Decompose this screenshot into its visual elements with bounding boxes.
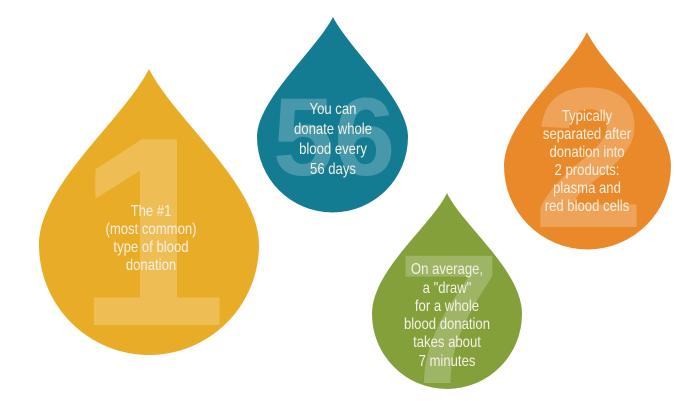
text: most common: type of blood [113,239,189,256]
text: separated into 2 products [543,108,631,215]
big digit 2: 2 [533,47,645,270]
text: most common: The #1 [131,203,171,220]
text: donate every 56 days [294,101,372,178]
text: donate every 56 days: blood every [299,141,368,158]
text: draw takes 7 minutes [404,261,490,370]
text: separated into 2 products: donation into [549,144,625,161]
text: most common: donation [126,257,176,274]
drop: green 7 [372,193,522,401]
text: most common: (most common) [105,221,197,238]
text: separated into 2 products: red blood cells [545,198,629,215]
text: separated into 2 products: Typically [562,108,613,125]
drop: yellow #1 [39,69,259,383]
text: donate every 56 days: 56 days [310,161,356,178]
text: separated into 2 products: plasma and [553,180,621,197]
drop: teal 56 [257,17,408,212]
text: draw takes 7 minutes: takes about [413,334,481,351]
text: draw takes 7 minutes: a "draw" [423,280,471,297]
text: separated into 2 products: separated after [543,126,631,143]
text: draw takes 7 minutes: On average, [411,261,483,278]
text: draw takes 7 minutes: 7 minutes [419,353,475,370]
big digit 1: 1 [77,82,227,383]
text: most common [105,203,197,274]
text: separated into 2 products: 2 products: [555,162,619,179]
drop: orange 2 [504,32,671,270]
text: draw takes 7 minutes: for a whole [415,298,479,315]
text: donate every 56 days: donate whole [294,121,372,138]
text: donate every 56 days: You can [310,101,356,118]
big digit 56: 56 [273,76,395,199]
text: draw takes 7 minutes: blood donation [404,316,490,333]
